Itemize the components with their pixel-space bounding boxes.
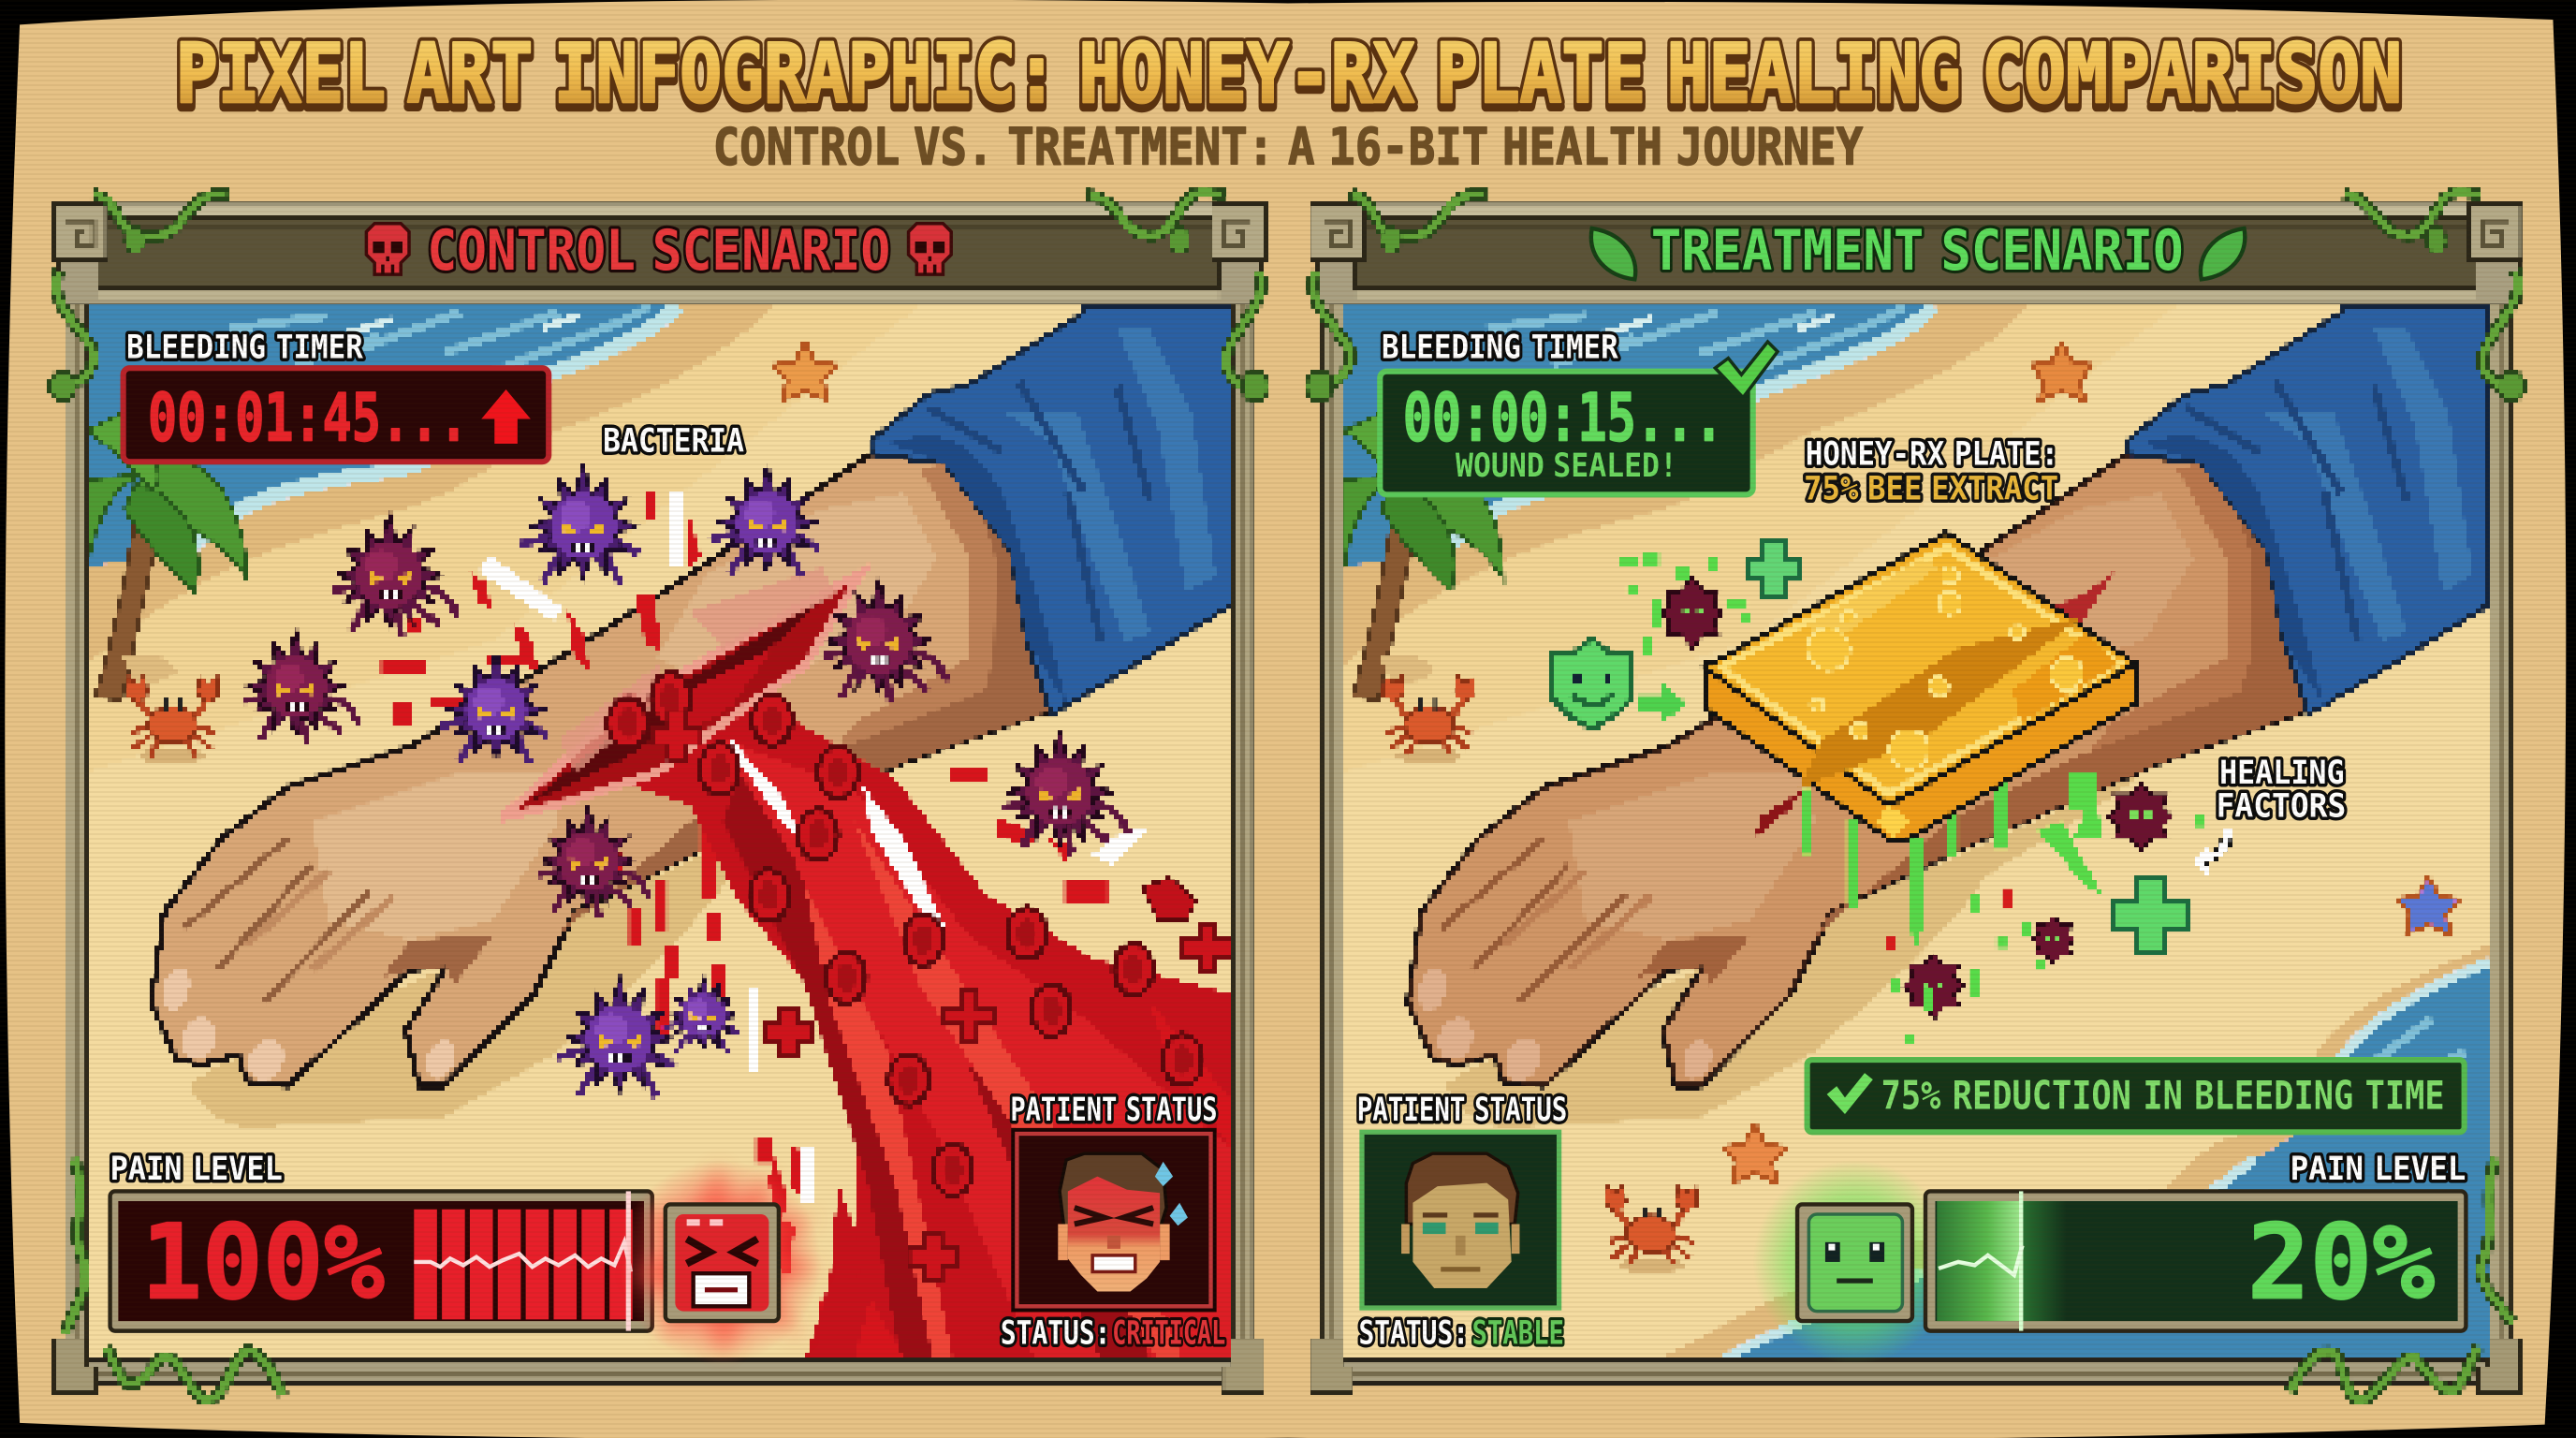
pain level gauge — [1925, 1150, 2466, 1331]
bleeding timer: WOUND SEALED! — [1456, 447, 1677, 485]
stone frame — [54, 202, 1265, 1393]
honey drips — [1802, 777, 2008, 948]
healing arrow — [2198, 829, 2228, 861]
water: bottom right — [1660, 945, 2489, 1358]
icon: rising arrow — [481, 389, 531, 444]
control panel artwork — [54, 202, 1265, 1393]
blood stream — [592, 694, 1232, 1358]
header: control scenario: CONTROL SCENARIO — [427, 219, 890, 284]
bleeding timer — [1380, 329, 1778, 494]
pain level gauge: 20% — [2247, 1203, 2435, 1324]
blood chunk — [1142, 877, 1196, 920]
wound — [501, 572, 862, 818]
pain face: angry — [618, 1160, 822, 1364]
header: treatment scenario: TREATMENT SCENARIO — [1651, 219, 2184, 284]
patient status: stable: STATUS: — [1358, 1314, 1469, 1353]
starfish: orange — [1723, 1123, 1786, 1183]
subtitle: CONTROL VS. TREATMENT: A 16-BIT HEALTH JOURNEY — [713, 118, 1863, 177]
panel: treatment scenario — [1306, 192, 2525, 1400]
label: bacteria: BACTERIA — [603, 422, 744, 461]
pain fill — [1937, 1201, 2021, 1321]
patient status: critical: PATIENT STATUS — [1010, 1091, 1218, 1129]
shield — [1553, 638, 1632, 729]
pain level gauge: PAIN LEVEL — [110, 1150, 283, 1188]
sleeve — [871, 305, 1232, 714]
bubbles — [1808, 567, 2083, 769]
callout: 75% reduction — [1808, 1060, 2465, 1132]
bleeding timer — [124, 329, 549, 462]
icon: check mark — [1715, 342, 1778, 398]
label: healing factors: FACTORS — [2217, 786, 2346, 825]
icon: leaf right — [2201, 228, 2245, 279]
vines — [1306, 192, 2525, 1400]
icon: leaf left — [1591, 228, 1635, 279]
beach scene with arm and honey plate — [1344, 305, 2489, 1358]
pain bars — [414, 1210, 633, 1319]
crab — [126, 675, 218, 764]
arm warm tint — [1408, 453, 2308, 1086]
pain level gauge: 100% — [141, 1203, 385, 1324]
healing crosses — [1747, 542, 1801, 596]
patient face: in pain — [1058, 1153, 1188, 1292]
arm — [151, 453, 1051, 1127]
bleeding timer: BLEEDING TIMER — [126, 329, 364, 367]
bleeding timer: BLEEDING TIMER — [1382, 329, 1619, 367]
bleeding timer: 00:01:45... — [148, 379, 468, 456]
starfish: blue — [2397, 875, 2459, 935]
patient status: stable: PATIENT STATUS — [1357, 1091, 1567, 1129]
blood cells — [607, 697, 648, 748]
label: honey-rx plate — [1804, 435, 2058, 508]
starfish — [774, 342, 836, 401]
icon: check — [1827, 1073, 1873, 1114]
patient status: critical: CRITICAL — [1112, 1314, 1225, 1353]
vines — [50, 192, 1268, 1400]
label: healing factors — [2217, 754, 2346, 825]
starfish — [2030, 342, 2093, 401]
bacteria — [243, 463, 1128, 1098]
pain level gauge: PAIN LEVEL — [2291, 1150, 2466, 1188]
pain level gauge — [110, 1150, 652, 1331]
beach scene with arm, wound, bacteria and blood — [87, 305, 1232, 1358]
wound remnants — [2045, 572, 2115, 633]
patient status: critical — [1001, 1091, 1225, 1353]
treatment panel artwork — [1311, 202, 2522, 1393]
patient status: critical: STATUS: — [1001, 1314, 1110, 1353]
splatter — [381, 493, 1107, 1358]
green arrow — [1640, 683, 1687, 723]
arm — [1408, 453, 2308, 1127]
sleeve — [2128, 305, 2489, 714]
green sparkles — [1618, 550, 2203, 1045]
panel: control scenario — [50, 192, 1268, 1400]
label: healing factors: HEALING — [2219, 754, 2345, 792]
honey-rx plate — [1705, 533, 2136, 840]
callout: 75% reduction: 75% REDUCTION IN BLEEDING TIME — [1881, 1073, 2445, 1119]
crabs — [1383, 675, 1475, 764]
pain face: neutral — [1753, 1160, 1956, 1364]
label: honey-rx plate: 75% BEE EXTRACT — [1804, 470, 2058, 508]
patient face: calm — [1401, 1153, 1519, 1288]
stone frame — [1311, 202, 2522, 1393]
bleeding timer: 00:00:15... — [1403, 379, 1723, 456]
neutralized bacteria — [1661, 579, 2172, 1019]
patient status: stable: STABLE — [1472, 1314, 1564, 1353]
patient status: stable — [1357, 1091, 1567, 1353]
label: honey-rx plate: HONEY-RX PLATE: — [1806, 435, 2058, 474]
